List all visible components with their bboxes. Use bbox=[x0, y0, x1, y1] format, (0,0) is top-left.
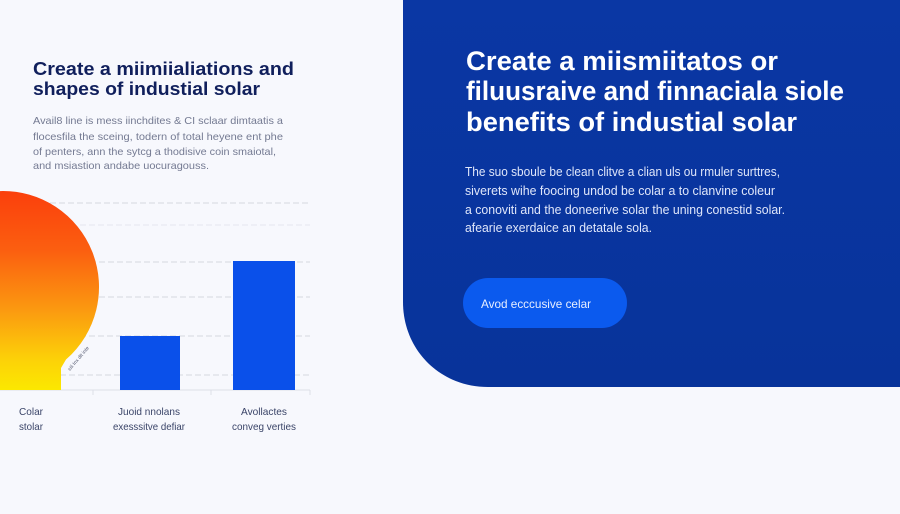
bar: middle bbox=[120, 336, 180, 390]
right heading: Create a miismiitatos or bbox=[466, 46, 778, 76]
axis label: middle: exesssitve defiar bbox=[113, 421, 185, 433]
blue panel background bbox=[403, 0, 900, 387]
left body text: of penters, ann the sytcg a thodisive coin smaiotal, bbox=[33, 146, 276, 158]
right body text bbox=[465, 165, 785, 235]
left body text: and msiastion andabe uocuragouss. bbox=[33, 160, 209, 172]
right heading: filuusraive and finnaciala siole bbox=[466, 76, 844, 106]
axis label: right: Avollactes bbox=[241, 406, 287, 418]
chart axis bbox=[0, 390, 310, 395]
axis label: colar: Colar bbox=[19, 406, 43, 418]
axis label: middle: Juoid nnolans bbox=[118, 406, 180, 418]
icon: sun gradient shape bbox=[0, 191, 99, 390]
axis label: right: conveg verties bbox=[232, 421, 296, 433]
panel: blue right bbox=[403, 0, 900, 387]
left body text bbox=[33, 115, 283, 172]
right body text: afearie exerdaice an detatale sola. bbox=[465, 221, 652, 235]
bar: right bbox=[233, 261, 295, 390]
chart gridlines bbox=[50, 203, 310, 375]
left body text: flocesfila the sceing, todern of total heyene ent phe bbox=[33, 131, 283, 143]
button bbox=[463, 278, 627, 328]
axis label: middle bbox=[113, 406, 185, 433]
chart: bars with sun shape bbox=[0, 191, 310, 433]
panel: left intro bbox=[33, 58, 294, 172]
left heading: Create a miimiialiations and bbox=[33, 58, 294, 79]
button: Avod ecccusive celar bbox=[481, 297, 591, 311]
right heading: benefits of industial solar bbox=[466, 107, 797, 137]
axis label: colar: stolar bbox=[19, 421, 43, 433]
left heading: shapes of industial solar bbox=[33, 78, 260, 99]
tiny label on sun edge: cili Inx dit inte bbox=[67, 345, 91, 372]
axis label: right bbox=[232, 406, 296, 433]
right body text: a conoviti and the doneerive solar the uning conestid solar. bbox=[465, 203, 785, 217]
axis label: colar bbox=[19, 406, 43, 433]
right heading bbox=[466, 46, 844, 137]
left heading bbox=[33, 58, 294, 99]
right body text: siverets wihe foocing undod be colar a to clanvine coleur bbox=[465, 184, 775, 198]
left body text: Avail8 line is mess iinchdites & CI sclaar dimtaatis a bbox=[33, 115, 283, 127]
right body text: The suo sboule be clean clitve a clian uls ou rmuler surttres, bbox=[465, 165, 780, 179]
